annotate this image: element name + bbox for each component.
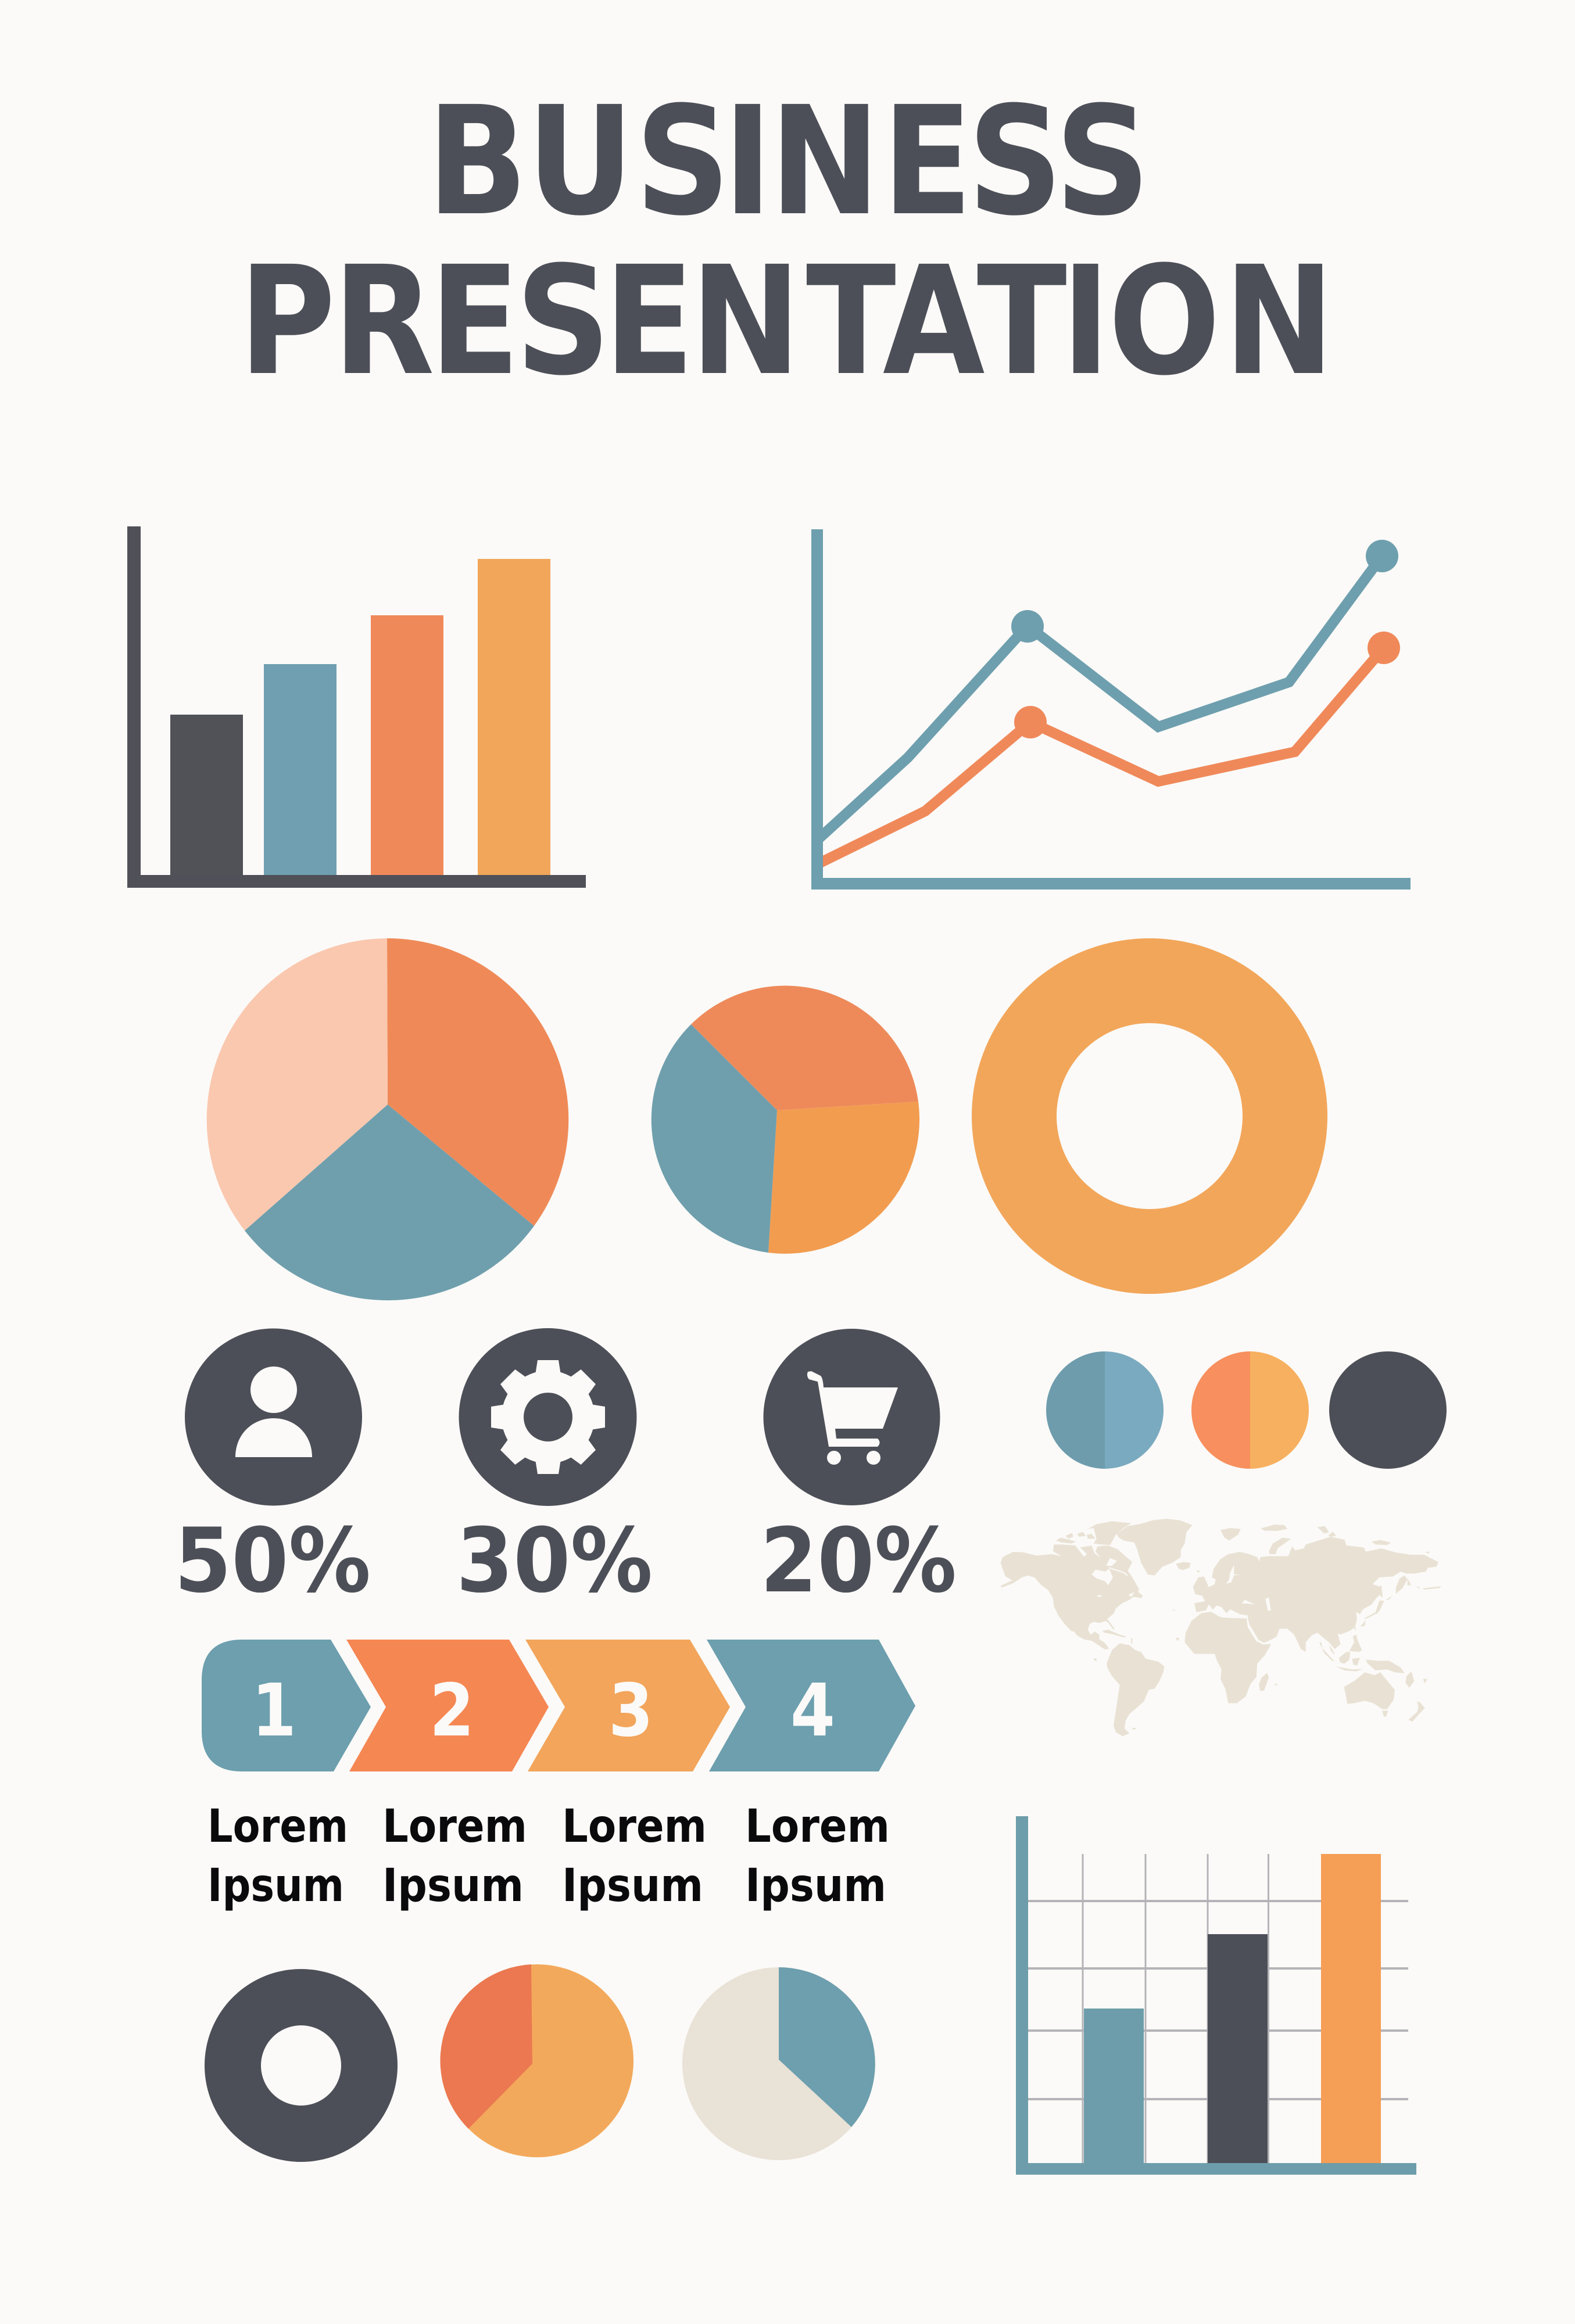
arctic islands bbox=[1220, 1525, 1430, 1554]
slice: orange bbox=[387, 938, 568, 1226]
process arrows bbox=[202, 1640, 915, 1771]
arrow numbers bbox=[252, 1669, 835, 1753]
label 1 bbox=[207, 1801, 348, 1912]
south east asia islands bbox=[1319, 1634, 1427, 1688]
africa bbox=[1184, 1612, 1271, 1703]
colour swatch: orange bbox=[1191, 1351, 1309, 1469]
grid bar chart bbox=[1016, 1816, 1416, 2175]
eurasia bbox=[1193, 1537, 1438, 1652]
donut chart: orange bbox=[972, 938, 1327, 1294]
icon: gear bbox=[459, 1328, 637, 1506]
30%: 30% bbox=[456, 1509, 653, 1613]
arrow 3 bbox=[525, 1640, 730, 1771]
donut chart: dark bbox=[205, 1969, 398, 2162]
north america bbox=[1001, 1544, 1143, 1649]
line chart: top right bbox=[811, 529, 1411, 890]
arrow numbers: 1 bbox=[252, 1669, 296, 1753]
slice: blue bbox=[245, 1104, 534, 1300]
arrow numbers: 3 bbox=[608, 1669, 653, 1753]
slice: blue bbox=[652, 1024, 777, 1253]
pie chart: medium three-slice bbox=[652, 986, 919, 1254]
slice: orange bbox=[691, 986, 918, 1110]
title line 1: BUSINESS bbox=[427, 74, 1150, 249]
label 4 bbox=[745, 1801, 890, 1912]
bar 2 bbox=[264, 664, 337, 877]
label 1: Lorem bbox=[207, 1801, 348, 1853]
arrow numbers: 4 bbox=[790, 1669, 835, 1753]
australia and new zealand bbox=[1344, 1672, 1425, 1722]
icon: shopping cart bbox=[764, 1329, 940, 1505]
bar: teal bbox=[1084, 2009, 1144, 2163]
north pacific islands bbox=[1354, 1576, 1441, 1631]
axes bbox=[1016, 1816, 1416, 2175]
label 4: Ipsum bbox=[745, 1860, 886, 1912]
bar 3 bbox=[371, 615, 443, 877]
madagascar bbox=[1259, 1673, 1277, 1691]
icon: person bbox=[185, 1328, 362, 1506]
world map bbox=[1001, 1519, 1441, 1736]
blue dots bbox=[1011, 540, 1398, 643]
title line 2: PRESENTATION bbox=[239, 234, 1334, 409]
title bbox=[239, 74, 1334, 409]
blue line bbox=[817, 556, 1382, 841]
arrow 2 bbox=[346, 1640, 549, 1771]
label 1: Ipsum bbox=[207, 1860, 344, 1912]
pie chart: large three-slice bbox=[207, 938, 568, 1300]
orange dots bbox=[1014, 632, 1400, 738]
americas and atlantic bbox=[1001, 1519, 1200, 1736]
20%: 20% bbox=[760, 1509, 957, 1613]
label 2: Ipsum bbox=[382, 1860, 524, 1912]
south america bbox=[1107, 1643, 1164, 1736]
pie chart: amber and red bbox=[440, 1964, 633, 2157]
axes bbox=[811, 529, 1411, 890]
pie chart: beige and blue bbox=[682, 1967, 875, 2160]
colour swatch: blue bbox=[1046, 1351, 1164, 1469]
label 3: Ipsum bbox=[562, 1860, 703, 1912]
label 2 bbox=[382, 1801, 527, 1912]
arrow numbers: 2 bbox=[429, 1669, 474, 1753]
label 3 bbox=[562, 1801, 707, 1912]
bar: dark bbox=[1208, 1934, 1268, 2163]
arrow 1 bbox=[202, 1640, 371, 1771]
iceland bbox=[1176, 1562, 1190, 1570]
step labels bbox=[207, 1801, 890, 1912]
old world bbox=[1184, 1525, 1441, 1722]
greenland bbox=[1117, 1519, 1193, 1576]
bar: orange bbox=[1321, 1854, 1381, 2163]
label 4: Lorem bbox=[745, 1801, 890, 1853]
orange line bbox=[817, 648, 1384, 865]
label 3: Lorem bbox=[562, 1801, 707, 1853]
colour swatch: dark bbox=[1329, 1351, 1447, 1469]
50%: 50% bbox=[174, 1509, 371, 1613]
label 2: Lorem bbox=[382, 1801, 527, 1853]
percentages bbox=[174, 1509, 957, 1613]
bar chart: top left bbox=[127, 526, 586, 888]
hudson strait bbox=[1109, 1568, 1127, 1576]
bar 1 bbox=[170, 715, 243, 877]
arctic islands bbox=[1056, 1521, 1132, 1545]
slice: peach bbox=[207, 938, 388, 1231]
axes bbox=[127, 526, 586, 888]
caribbean and atlantic islands bbox=[1094, 1570, 1200, 1730]
bar 4 bbox=[478, 559, 550, 877]
slice: amber bbox=[768, 1102, 919, 1254]
arrow 4 bbox=[707, 1640, 915, 1771]
